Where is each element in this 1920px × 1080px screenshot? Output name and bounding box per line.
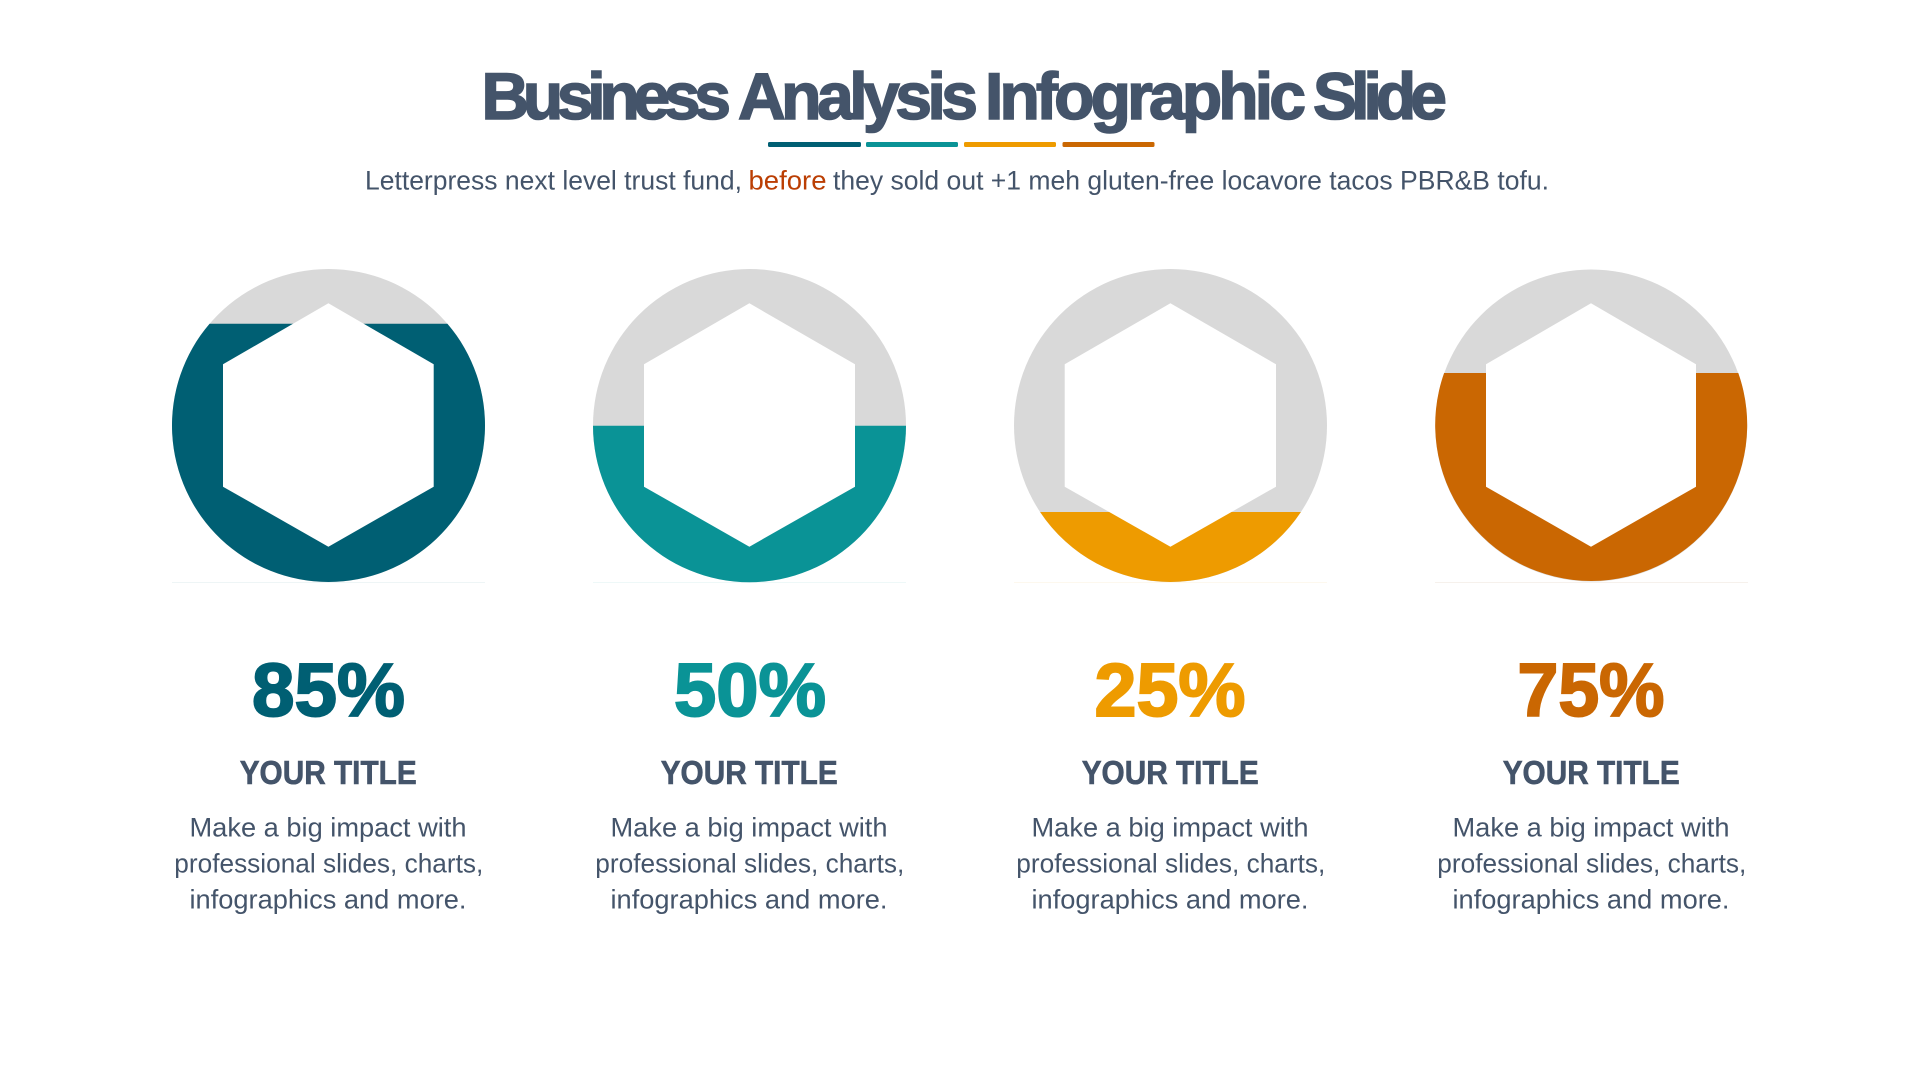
description: professional slides, charts, — [174, 848, 483, 878]
title: Analysis — [738, 59, 978, 133]
subtitle: they sold out +1 meh gluten-free locavore tacos PBR&B tofu. — [833, 166, 1549, 196]
percentage: 50%: 50% — [674, 648, 826, 732]
description: Make a big impact with — [1032, 812, 1308, 842]
title: Slide — [1313, 59, 1447, 133]
description: Make a big impact with — [190, 812, 466, 842]
description: professional slides, charts, — [1016, 848, 1325, 878]
description: professional slides, charts, — [1437, 848, 1746, 878]
gauge: 25% hexagon ring — [1014, 269, 1327, 583]
percentage: 85%: 85% — [252, 648, 405, 732]
gauge: 50% hexagon ring — [593, 269, 906, 583]
gauge: 85% hexagon ring — [172, 269, 485, 583]
description — [1437, 812, 1746, 914]
subtitle: before — [748, 166, 826, 196]
description: infographics and more. — [190, 884, 466, 914]
description: professional slides, charts, — [595, 848, 904, 878]
panel: 50% card — [593, 269, 906, 914]
title — [481, 59, 1447, 133]
title: Infographic — [985, 59, 1306, 133]
description: infographics and more. — [1032, 884, 1308, 914]
percentage: 25%: 25% — [1094, 648, 1246, 732]
description: infographics and more. — [610, 884, 888, 914]
heading: your title: YOUR TITLE — [1503, 754, 1680, 791]
title underline bars — [768, 142, 1154, 147]
panel: 25% card — [1014, 269, 1327, 914]
gauge: 75% hexagon ring — [1435, 270, 1748, 583]
heading: your title: YOUR TITLE — [1082, 754, 1259, 791]
heading: your title: YOUR TITLE — [661, 754, 838, 791]
heading: your title: YOUR TITLE — [240, 754, 417, 791]
subtitle: Letterpress next level trust fund, — [365, 166, 742, 196]
description: infographics and more. — [1452, 884, 1730, 914]
panel: 85% card — [172, 269, 485, 914]
description — [174, 812, 483, 914]
title: Business — [481, 59, 731, 133]
percentage: 75%: 75% — [1518, 648, 1664, 732]
panel: 75% card — [1435, 270, 1748, 914]
description: Make a big impact with — [610, 812, 888, 842]
description: Make a big impact with — [1452, 812, 1730, 842]
description — [595, 812, 904, 914]
subtitle — [365, 166, 1549, 196]
description — [1016, 812, 1325, 914]
